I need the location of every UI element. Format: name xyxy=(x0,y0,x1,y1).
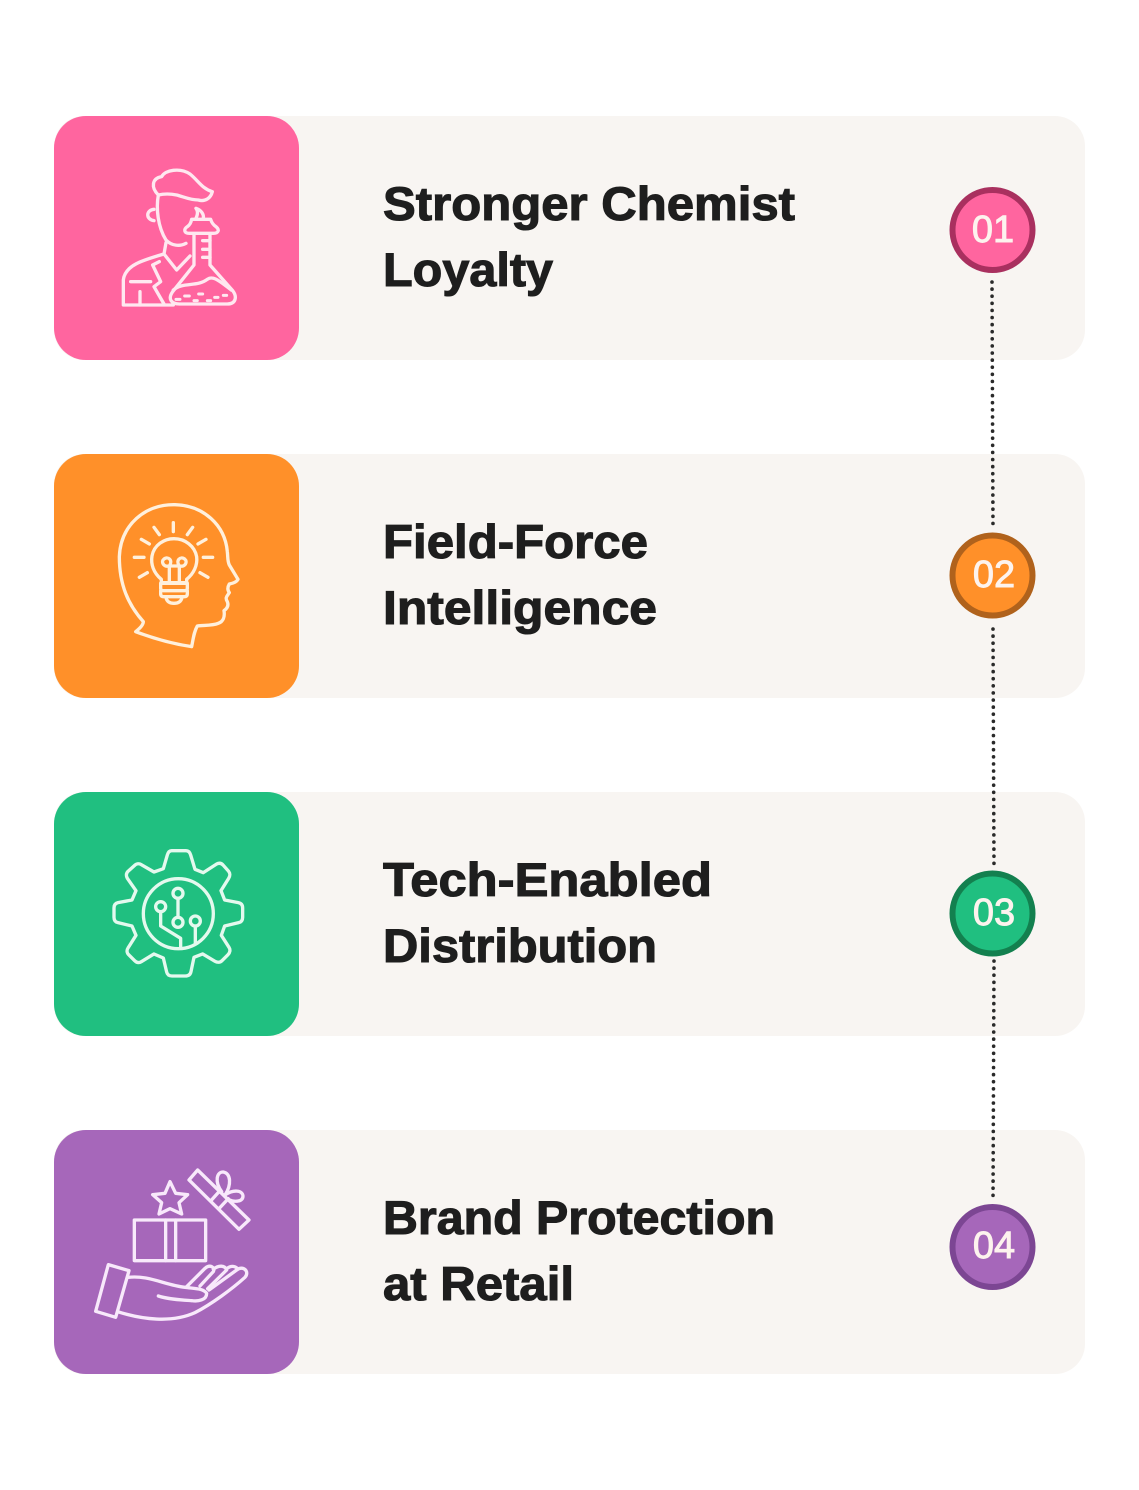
badge 03 xyxy=(952,874,1032,954)
dotted connector 1 to 2 xyxy=(992,282,993,530)
green icon tile xyxy=(54,792,299,1036)
panel: stronger chemist loyalty xyxy=(54,116,1085,360)
badge 04: 04 xyxy=(973,1225,1015,1267)
panel: brand protection at retail xyxy=(54,1130,1085,1374)
pink icon tile xyxy=(54,116,299,360)
badge 02: 02 xyxy=(973,554,1015,596)
heading: Intelligence xyxy=(383,581,657,634)
card background 4 xyxy=(54,1130,1085,1374)
badge 01 xyxy=(952,190,1032,270)
heading: Loyalty xyxy=(383,243,553,296)
card background 3 xyxy=(54,792,1085,1036)
card background 1 xyxy=(54,116,1085,360)
icon: head with light bulb xyxy=(119,505,238,647)
icon: chemist with flask xyxy=(123,170,235,305)
icon: gear with circuit xyxy=(114,851,243,976)
purple icon tile xyxy=(54,1130,299,1374)
badge 03: 03 xyxy=(973,892,1015,934)
heading: Tech-Enabled xyxy=(383,853,712,906)
badge 04 xyxy=(952,1207,1032,1287)
badge 01: 01 xyxy=(972,209,1014,251)
heading: Distribution xyxy=(383,919,657,972)
panel: field-force intelligence xyxy=(54,454,1085,698)
panel: tech-enabled distribution xyxy=(54,792,1085,1036)
icon: hand with gift and star xyxy=(96,1170,249,1319)
card background 2 xyxy=(54,454,1085,698)
heading: at Retail xyxy=(383,1257,574,1310)
badge 02 xyxy=(952,536,1032,616)
heading: Stronger Chemist xyxy=(383,177,795,230)
orange icon tile xyxy=(54,454,299,698)
heading: Field-Force xyxy=(383,515,648,568)
dotted connector 2 to 3 xyxy=(993,629,994,868)
dotted connector 3 to 4 xyxy=(993,961,994,1202)
heading: Brand Protection xyxy=(383,1191,775,1244)
